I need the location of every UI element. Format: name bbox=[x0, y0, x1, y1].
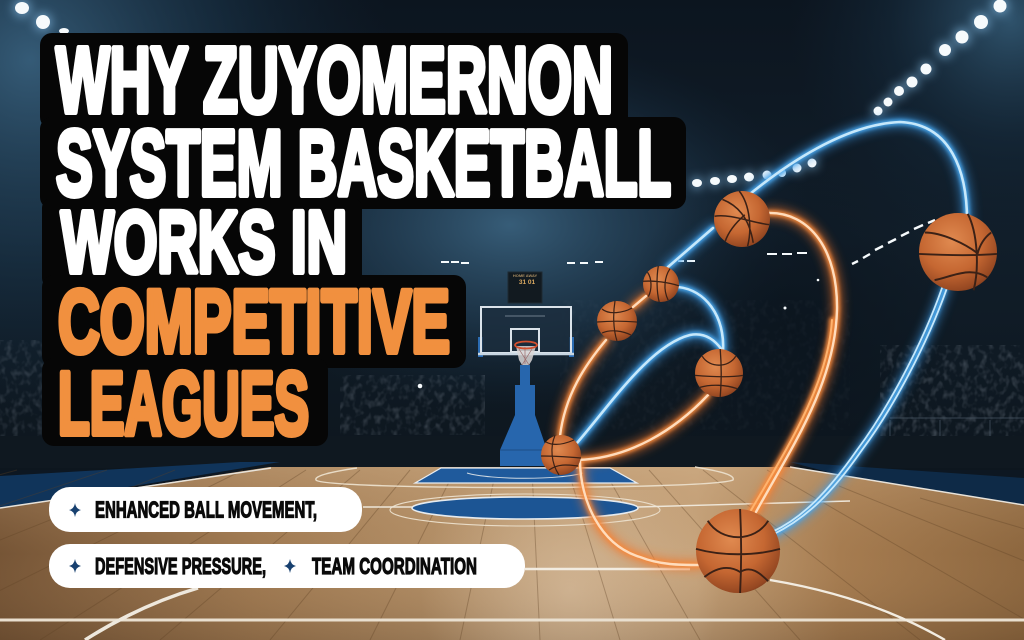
hoop pole bbox=[500, 365, 547, 466]
basketball: center right bbox=[695, 349, 743, 397]
court markings bbox=[0, 467, 1024, 640]
arena background bbox=[0, 0, 1024, 470]
icon: sparkle bbox=[69, 503, 81, 517]
icon: sparkle bbox=[284, 559, 296, 573]
crowd stands bbox=[0, 300, 1024, 508]
basketball: upper middle bbox=[643, 266, 679, 302]
basketball court floor bbox=[0, 467, 1024, 640]
basketball: lower left bbox=[541, 435, 581, 475]
basketball: top center bbox=[714, 191, 770, 247]
label: team coordination: TEAM COORDINATION bbox=[312, 553, 477, 579]
pill: enhanced ball movement bbox=[49, 487, 362, 532]
title line 1: WHY ZUYOMERNON bbox=[56, 28, 613, 132]
pill: defensive pressure and team coordination bbox=[49, 544, 525, 588]
hoop net bbox=[515, 342, 537, 365]
scoreboard: 31 01 bbox=[519, 279, 536, 286]
scoreboard: HOME AWAY bbox=[513, 273, 538, 278]
glowing trajectories bbox=[560, 122, 967, 565]
blue passing paths bbox=[577, 122, 967, 535]
arena lights bbox=[13, 0, 1009, 388]
basketball: far right bbox=[919, 213, 997, 291]
scoreboard bbox=[508, 272, 542, 303]
backboard bbox=[478, 307, 574, 357]
label: enhanced ball movement: ENHANCED BALL MOVEMENT, bbox=[95, 496, 317, 522]
basketball hoop bbox=[478, 272, 574, 466]
orange passing paths bbox=[560, 213, 837, 565]
title bbox=[40, 28, 686, 453]
icon: sparkle bbox=[69, 559, 81, 573]
basketball: left middle bbox=[597, 301, 637, 341]
title backing bbox=[40, 33, 686, 446]
basketball: bottom large bbox=[696, 509, 780, 593]
label: defensive pressure: DEFENSIVE PRESSURE, bbox=[95, 553, 266, 579]
title line 4: COMPETITIVE bbox=[58, 271, 450, 371]
title line 3: WORKS IN bbox=[61, 194, 347, 291]
title line 5: LEAGUES bbox=[58, 353, 309, 453]
